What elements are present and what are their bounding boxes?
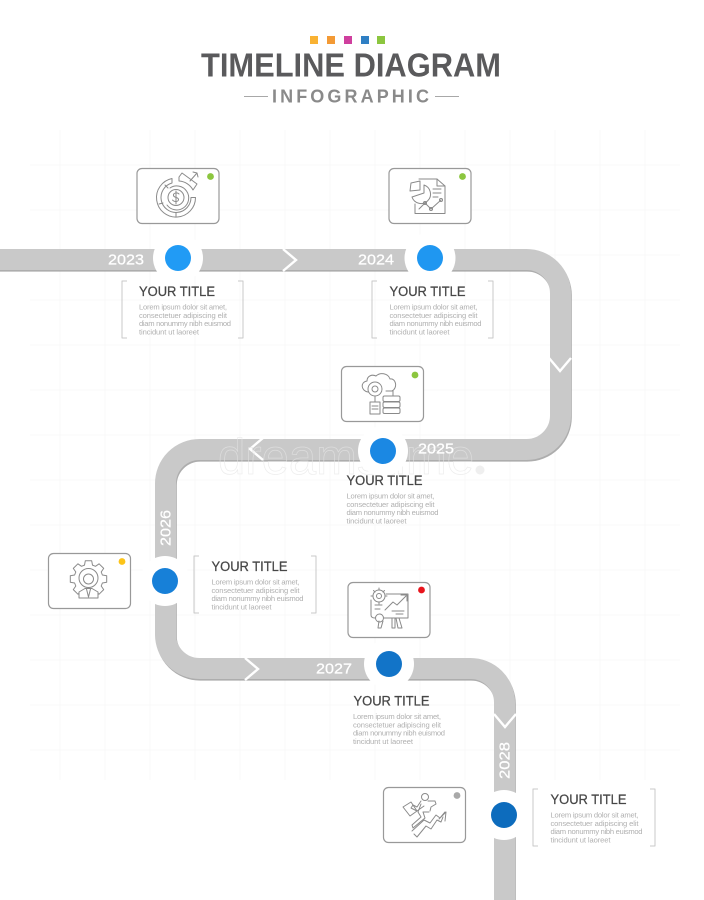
colour squares <box>310 36 385 44</box>
text panel: YOUR TITLE <box>390 284 466 299</box>
year label: 2028 <box>496 742 514 779</box>
icon card: running businessman <box>384 788 466 842</box>
text panel: YOUR TITLE <box>550 792 626 807</box>
icon card: gear and person <box>48 554 130 608</box>
node <box>479 790 529 840</box>
watermark: dreamstime <box>218 429 474 485</box>
milestone 2023 <box>108 168 243 338</box>
text panel: consectetuer adipiscing elit <box>550 819 639 828</box>
node <box>140 556 190 606</box>
text panel: consectetuer adipiscing elit <box>390 311 478 320</box>
milestone 2026 <box>48 510 316 613</box>
milestone 2025 <box>342 366 454 526</box>
title block <box>201 36 501 106</box>
text panel: consectetuer adipiscing elit <box>353 720 442 730</box>
text panel: YOUR TITLE <box>346 473 422 488</box>
text panel: Lorem ipsum dolor sit amet, <box>139 302 227 312</box>
text panel: consectetuer adipiscing elit <box>139 311 228 320</box>
icon card: cloud and database <box>342 366 424 422</box>
text panel: Lorem ipsum dolor sit amet, <box>550 810 638 820</box>
text panel: tincidunt ut laoreet <box>139 328 200 336</box>
text panel: YOUR TITLE <box>212 559 288 574</box>
timeline road <box>0 260 561 900</box>
text panel: diam nonummy nibh euismod <box>139 319 231 328</box>
year label: 2024 <box>358 252 394 268</box>
milestone 2027 <box>316 582 445 746</box>
icon card: dollar target <box>137 168 219 224</box>
node <box>404 232 456 284</box>
text panel: Lorem ipsum dolor sit amet, <box>212 578 300 586</box>
milestone 2024 <box>358 168 493 338</box>
year label: 2026 <box>158 510 174 546</box>
text panel: consectetuer adipiscing elit <box>212 586 300 595</box>
text panel: tincidunt ut laoreet <box>346 516 407 526</box>
text panel: diam nonummy nibh euismod <box>550 827 642 836</box>
year label: 2023 <box>108 252 144 268</box>
text panel: tincidunt ut laoreet <box>353 737 414 746</box>
text panel: YOUR TITLE <box>354 694 430 708</box>
text panel <box>533 789 655 846</box>
icon card: presentation board <box>348 582 430 638</box>
heading: TIMELINE DIAGRAM <box>201 46 501 84</box>
text panel: diam nonummy nibh euismod <box>390 319 482 328</box>
text panel: Lorem ipsum dolor sit amet, <box>353 712 441 721</box>
milestone 2028 <box>384 742 655 846</box>
road direction arrows <box>245 249 571 727</box>
subheading: INFOGRAPHIC <box>272 86 429 106</box>
node <box>153 233 203 283</box>
node <box>358 426 408 476</box>
node <box>364 639 414 689</box>
text panel: Lorem ipsum dolor sit amet, <box>390 302 478 312</box>
text panel: YOUR TITLE <box>139 284 215 299</box>
text panel: tincidunt ut laoreet <box>390 328 450 336</box>
text panel <box>194 556 316 613</box>
text panel: diam nonummy nibh euismod <box>212 594 304 603</box>
text panel: tincidunt ut laoreet <box>550 836 611 844</box>
text panel: diam nonummy nibh euismod <box>346 508 438 517</box>
text panel <box>346 473 438 526</box>
text panel <box>353 694 445 746</box>
text panel <box>372 281 493 338</box>
text panel: diam nonummy nibh euismod <box>353 728 445 738</box>
text panel: Lorem ipsum dolor sit amet, <box>346 492 434 500</box>
icon card: report <box>389 168 471 224</box>
text panel: consectetuer adipiscing elit <box>346 500 435 509</box>
text panel: tincidunt ut laoreet <box>212 602 272 612</box>
year label: 2027 <box>316 660 352 678</box>
text panel <box>122 281 243 338</box>
year label: 2025 <box>418 440 454 458</box>
